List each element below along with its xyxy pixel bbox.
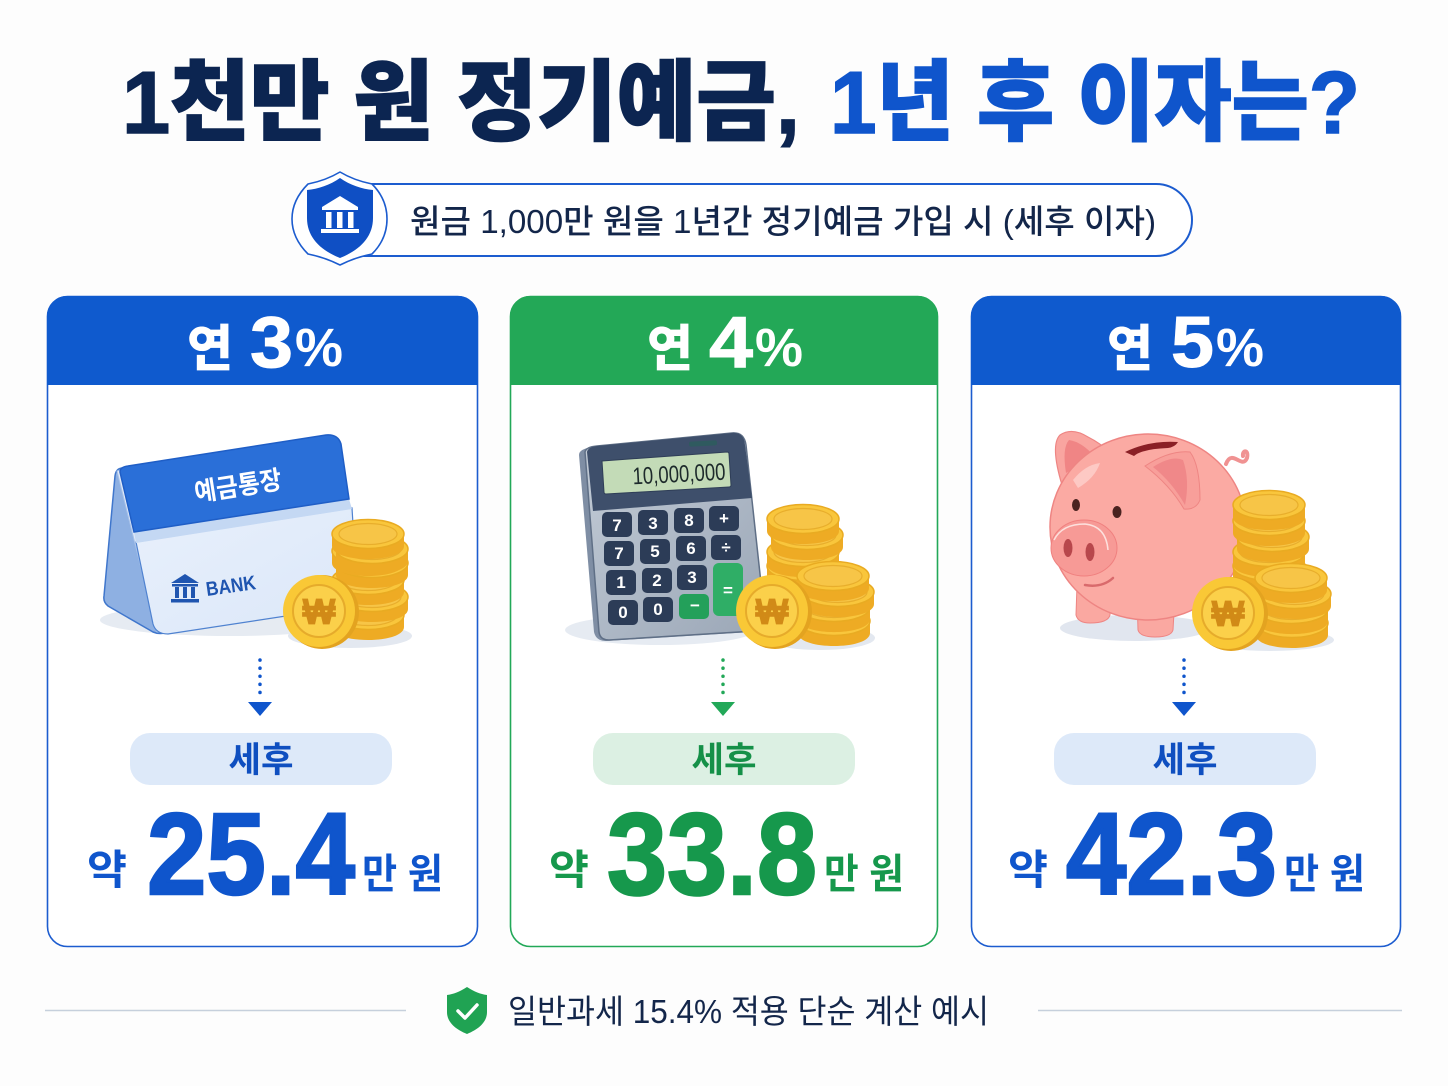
arrow xyxy=(1172,660,1196,716)
icon: passbook with coins: ₩ xyxy=(302,591,336,632)
keys xyxy=(602,506,741,625)
icon: calculator with coins: 3 xyxy=(687,568,697,587)
icon: green check shield xyxy=(447,987,487,1034)
panel: 연 5%: 세후 xyxy=(1152,732,1218,783)
panel: 연 3%: 25.4 xyxy=(147,789,355,919)
icon: calculator with coins: + xyxy=(719,509,729,528)
panel: 연 4%: 만 원 xyxy=(824,840,904,900)
amount: 약 xyxy=(1008,836,1048,896)
panel: 연 3%: % xyxy=(295,318,343,378)
panel: 연 4%: % xyxy=(755,318,803,378)
panel: 연 4% xyxy=(510,296,938,946)
header text: 연 xyxy=(647,309,693,381)
icon: calculator with coins: 5 xyxy=(650,542,660,561)
icon: passbook with coins: BANK xyxy=(205,572,258,601)
card frame xyxy=(48,296,478,946)
icon: passbook with coins xyxy=(100,435,412,649)
icon: calculator with coins: 8 xyxy=(684,511,694,530)
icon: calculator with coins: ₩ xyxy=(756,591,789,632)
subtitle text: 원금 1,000만 원을 1년간 정기예금 가입 시 (세후 이자) xyxy=(410,203,1156,240)
panel: 연 4%: 33.8 xyxy=(607,789,817,919)
header band xyxy=(510,296,938,385)
panel: 연 5%: 만 원 xyxy=(1284,840,1365,900)
panel: 연 5%: 5 xyxy=(1171,303,1214,383)
icon: calculator with coins: 6 xyxy=(686,539,696,558)
icon: calculator with coins: 10,000,000 xyxy=(632,459,726,490)
panel: 연 3% xyxy=(47,296,478,946)
panel: 연 3%: 세후 xyxy=(228,732,294,783)
icon: calculator with coins: 2 xyxy=(652,571,662,590)
footer note xyxy=(45,987,1402,1034)
icon: calculator with coins: 0 xyxy=(653,600,663,619)
arrow xyxy=(248,660,272,716)
icon: calculator with coins: ÷ xyxy=(721,538,731,557)
card frame xyxy=(510,296,938,946)
panel: 연 3%: 만 원 xyxy=(362,840,443,900)
title: 1년 후 이자는? xyxy=(830,53,1360,152)
icon: passbook with coins: 예금통장 xyxy=(191,459,284,510)
amount: 약 xyxy=(87,836,127,896)
panel: 연 5%: % xyxy=(1216,318,1264,378)
panel: 연 4%: 세후 xyxy=(692,732,756,783)
header band xyxy=(47,296,478,385)
after-tax pill xyxy=(130,733,392,785)
subtitle pill with shield badge xyxy=(292,172,1192,265)
footer text: 일반과세 15.4% 적용 단순 계산 예시 xyxy=(508,993,989,1030)
title: 1천만 원 정기예금, xyxy=(122,53,800,152)
after-tax pill xyxy=(593,733,855,785)
icon: piggy bank with coins: ₩ xyxy=(1212,593,1245,634)
after-tax pill xyxy=(1054,733,1316,785)
arrow xyxy=(711,660,735,716)
panel: 연 5%: 42.3 xyxy=(1066,789,1277,919)
icon: calculator with coins: 3 xyxy=(648,514,658,533)
title xyxy=(122,53,1360,152)
amount: 약 xyxy=(549,836,589,896)
panel: 연 4%: 4 xyxy=(709,303,753,383)
icon: calculator with coins: − xyxy=(690,596,700,615)
card frame xyxy=(972,296,1400,946)
icon: calculator with coins: 1 xyxy=(616,573,626,592)
icon: bank shield xyxy=(292,172,387,265)
subtitle pill xyxy=(320,184,1192,256)
icon: calculator with coins: = xyxy=(723,581,733,600)
panel: 연 3%: 3 xyxy=(250,303,293,383)
header band xyxy=(971,296,1401,385)
header text: 연 xyxy=(1107,309,1153,381)
icon: calculator with coins: 7 xyxy=(614,544,624,563)
icon: calculator with coins xyxy=(565,433,875,650)
icon: calculator with coins: 7 xyxy=(612,516,622,535)
icon: calculator with coins: 0 xyxy=(618,603,628,622)
header text: 연 xyxy=(187,309,233,381)
panel: 연 5% xyxy=(971,296,1401,946)
icon: piggy bank with coins xyxy=(1050,431,1334,651)
